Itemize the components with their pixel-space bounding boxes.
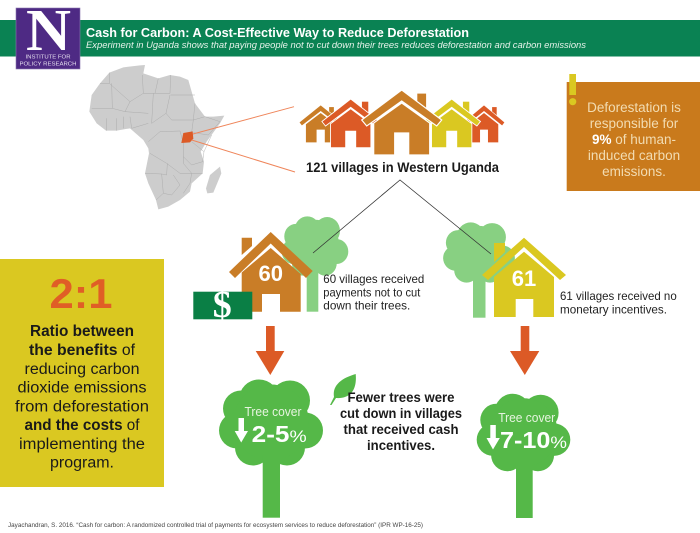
big number: 2:1 xyxy=(50,270,112,317)
house: red xyxy=(322,99,380,148)
panel: 2:1 ratio: the benefits of xyxy=(29,342,136,359)
text: 61 villages: monetary incentives. xyxy=(560,302,667,316)
callout: deforestation: induced carbon xyxy=(588,148,680,163)
icon: down arrow xyxy=(235,418,248,442)
panel: 2:1 ratio: and the costs of xyxy=(24,417,140,434)
icon: down arrow xyxy=(486,425,500,450)
header banner xyxy=(0,20,700,56)
tree: tree cover 2-5%: Tree cover xyxy=(244,405,302,419)
arrow: left down xyxy=(256,326,284,375)
logo: INSTITUTE FOR xyxy=(26,54,71,60)
text: 61 villages xyxy=(560,289,677,316)
panel: 2:1 ratio: dioxide emissions xyxy=(18,380,147,396)
panel: 2:1 ratio: implementing the xyxy=(19,436,145,453)
text: fewer trees xyxy=(340,389,462,453)
text: fewer trees: Fewer trees were xyxy=(348,389,455,405)
text: 60 villages xyxy=(323,272,424,312)
house: 60 villages: 60 xyxy=(258,261,283,286)
arrow: right down xyxy=(510,326,539,375)
icon: dollar bill xyxy=(193,284,252,326)
callout: deforestation: 9% of human- xyxy=(592,132,676,147)
panel: 2:1 ratio: from deforestation xyxy=(15,398,149,416)
tree: tree cover 7-10%: 7-10 % xyxy=(500,427,567,453)
text: fewer trees: cut down in villages xyxy=(340,405,462,421)
text: 60 villages: down their trees. xyxy=(323,298,410,312)
panel: 2:1 ratio xyxy=(0,259,164,487)
callout: deforestation: emissions. xyxy=(602,164,666,179)
icon: exclamation mark xyxy=(569,74,576,105)
tree: pale left xyxy=(282,216,348,312)
callout: deforestation: Deforestation is xyxy=(587,100,681,115)
house: 61 villages xyxy=(482,238,566,317)
house: 60 villages xyxy=(229,232,313,312)
house: left orange xyxy=(299,105,342,143)
house: yellow xyxy=(423,99,480,148)
tree: tree cover 7-10% xyxy=(477,394,570,518)
icon: leaf xyxy=(330,374,356,405)
title: Cash for Carbon: A Cost-Effective Way to Reduce Deforestation xyxy=(86,25,469,40)
text: 61 villages: 61 villages received no xyxy=(560,289,677,303)
house: 61 villages: 61 xyxy=(512,266,536,291)
subtitle: Experiment in Uganda shows that paying people not to cut down their trees reduces deforestation and carbon emissions xyxy=(86,40,586,51)
callout: deforestation: responsible for xyxy=(590,116,679,131)
heading: 121 villages: 121 villages in Western Uganda xyxy=(306,159,499,175)
panel: 2:1 ratio: reducing carbon xyxy=(24,361,140,378)
callout: deforestation xyxy=(567,74,700,191)
map of Africa xyxy=(89,65,224,209)
connector lines from Uganda xyxy=(192,107,295,172)
house: large centre xyxy=(362,90,442,155)
Uganda highlight xyxy=(181,131,193,143)
panel: 2:1 ratio: Ratio between xyxy=(30,323,134,340)
branch lines xyxy=(313,180,491,254)
text: 60 villages: payments not to cut xyxy=(323,285,421,299)
village houses xyxy=(299,90,505,155)
text: fewer trees: that received cash xyxy=(344,421,458,437)
logo xyxy=(16,0,80,69)
tree: tree cover 2-5%: 2-5 % xyxy=(252,421,307,447)
tree: tree cover 7-10%: Tree cover xyxy=(498,411,555,425)
house: right red xyxy=(463,105,505,143)
tree: tree cover 2-5% xyxy=(219,380,323,518)
citation: Jayachandran, S. 2016. “Cash for carbon: A randomized controlled trial of payments for ecosystem services to reduce deforestation” (IPR WP-16-25) xyxy=(8,522,423,529)
tree: pale right xyxy=(443,222,515,318)
logo: POLICY RESEARCH xyxy=(20,62,77,68)
panel: 2:1 ratio: program. xyxy=(50,454,114,472)
icon: dollar bill: $ xyxy=(213,284,232,326)
text: 60 villages: 60 villages received xyxy=(323,272,424,286)
text: fewer trees: incentives. xyxy=(367,437,435,453)
